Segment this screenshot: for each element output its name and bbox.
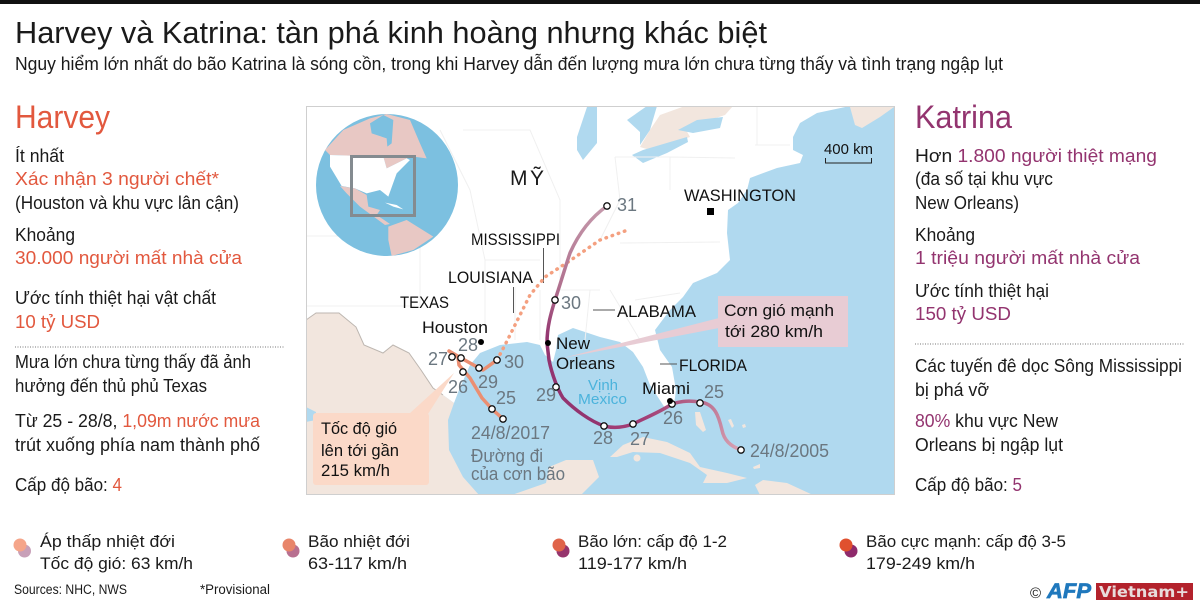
place labels: New [556,334,591,353]
Katrina levee text: Orleans bị ngập lụt [915,435,1063,455]
callout: Harvey wind: lên tới gần [321,441,399,460]
Harvey deaths: Ít nhất [15,146,64,166]
callout: Harvey wind: Tốc độ gió [321,419,397,438]
Katrina homeless: 1 triệu người mất nhà cửa [915,248,1141,268]
Katrina deaths [915,146,1157,213]
scale bar: 400 km [824,141,873,158]
logos: AFP [1046,580,1092,603]
heading: Katrina: Katrina [915,99,1012,135]
land: Canada [640,106,733,150]
legend: tropical depression: Tốc độ gió: 63 km/h [40,554,193,573]
Katrina damage [915,281,1049,324]
Harvey rain text: Từ 25 - 28/8, 1,09m nước mưa [15,411,261,431]
date labels: 25 [704,382,724,402]
callout: Katrina wind: Cơn gió mạnh [724,301,834,320]
date labels: của cơn bão [471,464,565,484]
logos: Vietnam+ [1099,583,1189,601]
heading: Harvey: Harvey [15,99,110,135]
Harvey deaths [15,146,239,213]
state lines [306,106,790,340]
legend: tropical depression [14,532,193,573]
Harvey homeless: 30.000 người mất nhà cửa [15,248,243,268]
legend: extreme storm: Bão cực mạnh: cấp độ 3-5 [866,532,1066,551]
track: Harvey [449,231,625,419]
Katrina levee text: 80% khu vực New [915,411,1059,431]
date labels: 24/8/2005 [750,441,829,461]
legend: tropical storm: Bão nhiệt đới [308,532,410,551]
Harvey deaths: Xác nhận 3 người chết* [15,169,219,189]
Harvey rain text: Mưa lớn chưa từng thấy đã ảnh [15,352,251,372]
label: MỸ: MỸ [510,166,544,190]
legend: extreme storm [840,532,1066,573]
date labels: 24/8/2017 [471,423,550,443]
title: Harvey và Katrina: tàn phá kinh hoàng nhưng khác biệt [15,15,767,50]
Katrina levee text [915,356,1182,455]
Katrina deaths: Hơn 1.800 người thiệt mạng [915,146,1157,166]
place labels: Vịnh [588,377,618,394]
land: USA [306,106,850,408]
date labels: 26 [448,377,468,397]
footnote: *Provisional [200,582,270,597]
place labels [400,230,748,408]
callout: Harvey wind: 215 km/h [321,461,390,480]
callout: Katrina wind [563,296,848,358]
date labels: 27 [428,349,448,369]
subtitle: Nguy hiểm lớn nhất do bão Katrina là sóng cồn, trong khi Harvey dẫn đến lượng mưa lớn chưa từng thấy và tình trạng ngập lụt [15,53,1003,74]
Katrina levee text: bị phá vỡ [915,380,989,400]
leader lines [514,248,677,364]
track: Katrina [547,206,741,450]
land: Mexico [306,313,599,497]
legend: extreme storm: 179-249 km/h [866,554,975,573]
legend: major storm: Bão lớn: cấp độ 1-2 [578,532,727,551]
Katrina category: Cấp độ bão: 5 [915,475,1022,495]
Harvey damage [15,288,216,332]
logos: © [1030,585,1041,602]
date labels: 31 [617,195,637,215]
inset globe [316,114,458,256]
legend: tropical storm: 63-117 km/h [308,554,407,573]
place labels: ALABAMA [617,302,697,321]
Harvey damage: Ước tính thiệt hại vật chất [15,288,216,308]
date labels: 28 [593,428,613,448]
land: Cuba [610,437,747,483]
Harvey damage: 10 tỷ USD [15,312,100,332]
Harvey rain text [15,352,261,455]
date labels: 28 [458,335,478,355]
land: Bahamas [695,412,760,469]
legend: major storm [552,532,727,573]
place labels: Houston [422,318,488,337]
label: Washington: WASHINGTON [684,186,796,205]
Harvey homeless: Khoảng [15,225,75,245]
panel: Harvey [15,99,285,495]
Harvey category: Cấp độ bão: 4 [15,475,122,495]
date labels: 29 [478,372,498,392]
place labels: FLORIDA [679,356,748,375]
legend: tropical depression: Áp thấp nhiệt đới [40,532,175,551]
callout: Katrina wind: tới 280 km/h [725,322,823,341]
Harvey deaths: (Houston và khu vực lân cận) [15,193,239,213]
place labels: TEXAS [400,293,449,312]
Katrina deaths: New Orleans) [915,193,1019,213]
Katrina damage: Ước tính thiệt hại [915,281,1049,301]
date labels: 25 [496,388,516,408]
Katrina damage: 150 tỷ USD [915,304,1011,324]
Harvey homeless [15,225,243,268]
logos [1030,580,1193,603]
panel: Katrina [915,99,1185,495]
date labels: 26 [663,408,683,428]
top bar [0,0,1200,4]
date labels: 30 [561,293,581,313]
Katrina homeless: Khoảng [915,225,975,245]
Harvey rain text: hưởng đến thủ phủ Texas [15,376,207,396]
Harvey rain text: trút xuống phía nam thành phố [15,435,260,455]
Katrina levee text: Các tuyến đê dọc Sông Mississippi [915,356,1182,376]
sources: Sources: NHC, NWS [14,582,127,597]
place labels: Mexico [578,391,627,408]
place labels: MISSISSIPPI [471,230,560,249]
legend: major storm: 119-177 km/h [578,554,687,573]
map [306,106,894,497]
Katrina homeless [915,225,1141,268]
date labels: 29 [536,385,556,405]
date labels: Đường đi [471,446,543,466]
date labels: 27 [630,429,650,449]
lakes [577,107,597,160]
legend [14,532,1066,573]
track markers [449,203,744,453]
date labels: 30 [504,352,524,372]
land: Hispaniola [755,480,810,494]
place labels: Miami [642,379,690,398]
label: Washington [684,186,796,215]
callout: Harvey wind [313,373,454,485]
date labels [428,195,829,484]
place labels: LOUISIANA [448,268,534,287]
legend: tropical storm [282,532,410,573]
place labels: Orleans [556,354,615,373]
Katrina deaths: (đa số tại khu vực [915,169,1053,189]
